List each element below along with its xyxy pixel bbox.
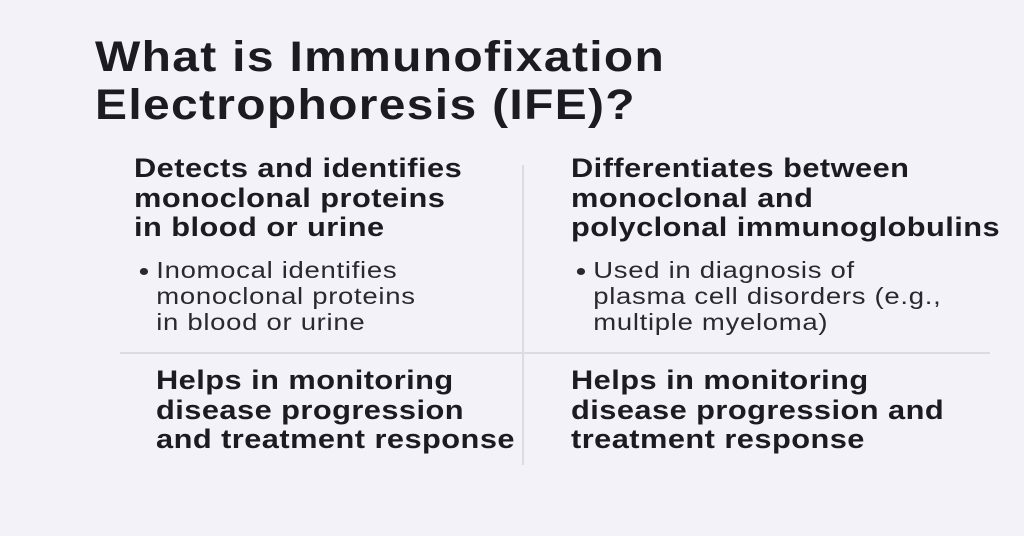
title: What is Immunofixation [95,33,665,81]
panel: bottom right heading: treatment response [571,424,865,454]
heading: detects: Detects and identifies [134,153,462,183]
heading: differentiates: monoclonal and [571,182,813,212]
panel: bottom right heading [571,365,944,454]
panel: bottom left heading: Helps in monitoring [156,365,454,395]
heading: detects [134,153,462,242]
panel: bottom left heading: disease progression [156,394,464,424]
bullet: inomocal: Inomocal identifies [156,257,397,283]
title: Electrophoresis (IFE)? [95,81,636,129]
title [95,33,665,129]
bullet: inomocal: monoclonal proteins [156,283,416,309]
panel: top right [571,153,1000,335]
heading: differentiates [571,153,1000,242]
heading: differentiates: polyclonal immunoglobulins [571,212,1000,242]
heading: detects: in blood or urine [134,212,385,242]
panel: bottom left heading: and treatment response [156,424,515,454]
panel: top left [134,153,462,335]
heading: differentiates: Differentiates between [571,153,909,183]
panel: bottom left heading [156,365,515,454]
heading: detects: monoclonal proteins [134,182,445,212]
panel: bottom right heading: Helps in monitoring [571,365,869,395]
bullet: used in diagnosis: plasma cell disorders (e.g., [593,283,941,309]
bullet: inomocal [140,257,416,335]
panel: bottom right heading: disease progression and [571,394,944,424]
bullet: used in diagnosis [576,257,941,335]
bullet: used in diagnosis: Used in diagnosis of [593,257,855,283]
bullet: used in diagnosis: multiple myeloma) [593,309,828,335]
bullet: inomocal: in blood or urine [156,309,365,335]
